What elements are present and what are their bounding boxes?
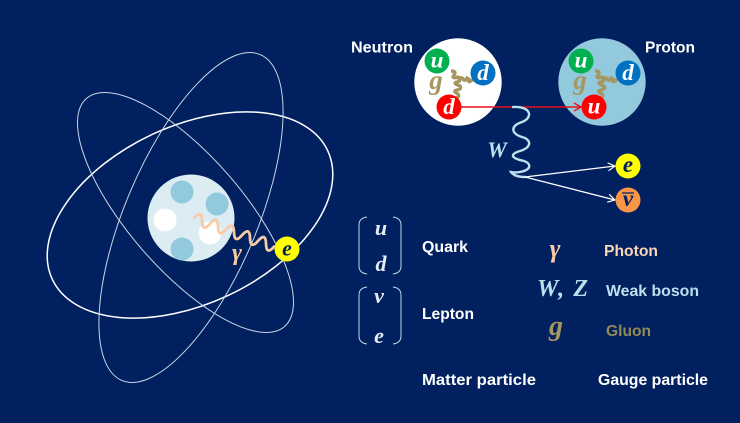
gauge particle caption: Gauge particle	[598, 372, 708, 389]
up quark green: u	[575, 48, 588, 72]
neutron label: Neutron	[351, 40, 413, 56]
gluon symbol: g	[548, 311, 563, 342]
weak boson symbols: W, Z	[537, 276, 588, 302]
down quark: d	[622, 60, 634, 85]
orbit: thin steep orbit	[61, 29, 321, 406]
emitted electron	[616, 152, 640, 178]
lepton bracket	[359, 283, 401, 348]
arrow: to antineutrino	[525, 177, 615, 200]
proton circle	[558, 38, 646, 126]
neutron circle	[414, 38, 502, 126]
lepton label: Lepton	[422, 306, 474, 323]
electron: e	[282, 236, 292, 260]
down quark red	[436, 94, 462, 120]
down quark red: d	[443, 94, 455, 119]
up quark red: u	[588, 94, 601, 118]
gluon lines	[595, 71, 618, 98]
quark label: Quark	[422, 239, 468, 256]
panel: proton	[558, 38, 695, 126]
W boson wavy line	[511, 107, 529, 177]
panel: gauge particles	[537, 234, 708, 389]
emitted electron: e	[623, 152, 633, 177]
quark bracket: d	[376, 251, 388, 276]
arrow: quark transition	[456, 106, 581, 108]
up quark	[424, 48, 450, 74]
photon label: Photon	[604, 243, 658, 260]
orbit: thin descending orbit	[43, 61, 328, 364]
gluon lines	[451, 71, 474, 98]
matter particle caption: Matter particle	[422, 372, 536, 389]
panel: matter particles	[359, 215, 536, 389]
photon wavy line	[192, 213, 276, 252]
gluon symbol: g	[572, 65, 587, 95]
photon symbol: γ	[232, 240, 242, 266]
nucleus	[148, 174, 234, 262]
antineutrino	[616, 186, 640, 212]
gluon symbol: g	[428, 65, 443, 95]
gluon label: Gluon	[606, 323, 651, 340]
electron	[274, 236, 300, 262]
antineutrino: ν	[623, 186, 634, 211]
arrow: to electron	[525, 166, 615, 177]
lepton bracket: ν	[374, 283, 384, 308]
quark bracket: u	[375, 215, 387, 240]
down quark blue: d	[477, 60, 489, 85]
weak boson label: Weak boson	[606, 283, 699, 300]
photon symbol: γ	[550, 234, 561, 263]
lepton bracket: e	[374, 323, 384, 348]
up quark: u	[431, 48, 444, 72]
orbit: thick electron orbit	[15, 70, 365, 360]
W symbol: W	[487, 137, 508, 162]
panel: atom diagram	[15, 29, 365, 406]
proton label: Proton	[645, 40, 695, 56]
panel: neutron	[351, 38, 502, 126]
down quark blue	[470, 60, 496, 86]
quark bracket	[359, 215, 401, 276]
